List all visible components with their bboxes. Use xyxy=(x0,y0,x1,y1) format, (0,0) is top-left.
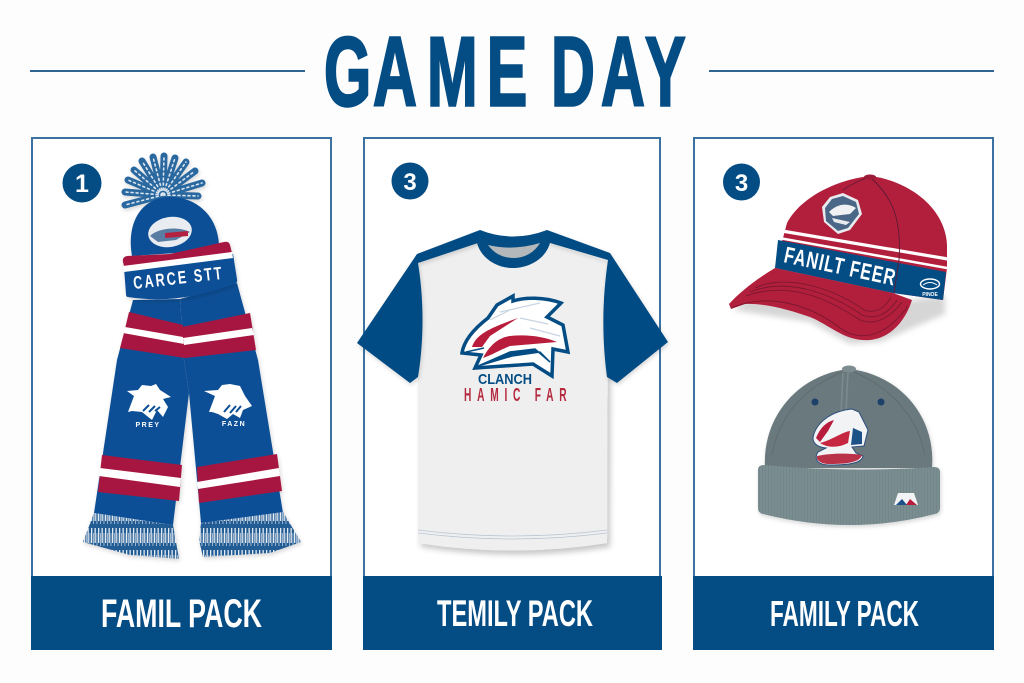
cap blue band xyxy=(775,240,946,300)
cuff red band xyxy=(123,242,232,266)
cap visor xyxy=(729,268,912,340)
icon: scarf xyxy=(83,283,301,559)
upper stripes xyxy=(120,312,256,358)
title: GAMEDAY xyxy=(324,18,686,127)
number badge 1 xyxy=(62,164,102,202)
cap logo xyxy=(813,409,868,465)
right sleeve and yoke xyxy=(544,230,668,383)
left fringe xyxy=(83,513,179,559)
icon: t-shirt xyxy=(357,230,668,550)
scarf logo right: FAZN xyxy=(222,421,246,428)
number badge 2 xyxy=(392,162,428,200)
cuff white band xyxy=(123,252,233,272)
footer label: temily pack: TEMILY PACK xyxy=(437,593,593,634)
cuff xyxy=(758,465,940,525)
left sleeve and yoke xyxy=(357,230,483,383)
dome side seams xyxy=(772,372,925,455)
scarf right strip xyxy=(180,283,283,523)
scarf logo right xyxy=(204,384,252,428)
cuff text: CARCE STT xyxy=(132,264,225,294)
beanie logo xyxy=(146,213,194,251)
icon: grey beanie cap xyxy=(758,366,940,525)
footer label: famil pack xyxy=(31,576,332,650)
cap dome xyxy=(765,369,932,468)
panel: caps xyxy=(693,138,994,650)
cap crown xyxy=(775,176,947,300)
neck inner xyxy=(488,243,540,258)
cap text: FANILT FEER xyxy=(782,243,899,291)
beanie dome xyxy=(131,197,219,256)
cap button xyxy=(864,174,876,180)
panel: t-shirt xyxy=(357,138,668,650)
pom pom xyxy=(125,156,202,205)
footer label: family pack: FAMILY PACK xyxy=(770,593,919,634)
cap seams xyxy=(843,177,899,293)
number badge 2: 3 xyxy=(403,169,417,196)
number badge 1: 1 xyxy=(75,170,89,198)
crown button xyxy=(842,366,856,372)
scarf logo left: PREY xyxy=(135,422,161,429)
number badge 3: 3 xyxy=(735,170,748,197)
shirt text clanch: CLANCH xyxy=(478,371,532,388)
footer label: famil pack: FAMIL PACK xyxy=(101,592,262,636)
panel frame xyxy=(32,138,331,649)
number badge 3 xyxy=(723,164,760,200)
eyelets xyxy=(812,398,884,406)
right fringe xyxy=(199,512,301,557)
cap patch xyxy=(822,193,862,234)
shirt text hamic far: HAMIC FAR xyxy=(464,385,572,406)
panel: scarf and beanie xyxy=(31,138,332,650)
icon: red cap xyxy=(729,174,948,344)
lower stripes xyxy=(98,454,282,503)
footer label: temily pack xyxy=(363,576,662,650)
panel frame xyxy=(694,138,993,649)
cap side logo xyxy=(920,279,940,298)
cuff small tag xyxy=(894,493,918,505)
shirt logo xyxy=(462,296,568,376)
beanie cuff xyxy=(124,254,237,299)
hem stitching xyxy=(418,530,607,539)
scarf left strip xyxy=(94,299,189,525)
visor stitching xyxy=(731,282,908,336)
scarf logo left xyxy=(127,384,171,429)
cap ground shadow xyxy=(733,290,945,344)
cap white stripes xyxy=(779,231,948,268)
icon: beanie xyxy=(123,156,237,299)
cap side logo: PINOE xyxy=(922,292,938,298)
collar xyxy=(477,230,550,268)
panel frame xyxy=(364,138,660,649)
shirt body xyxy=(418,243,608,550)
centre seam xyxy=(841,373,848,412)
footer label: family pack xyxy=(693,576,994,650)
